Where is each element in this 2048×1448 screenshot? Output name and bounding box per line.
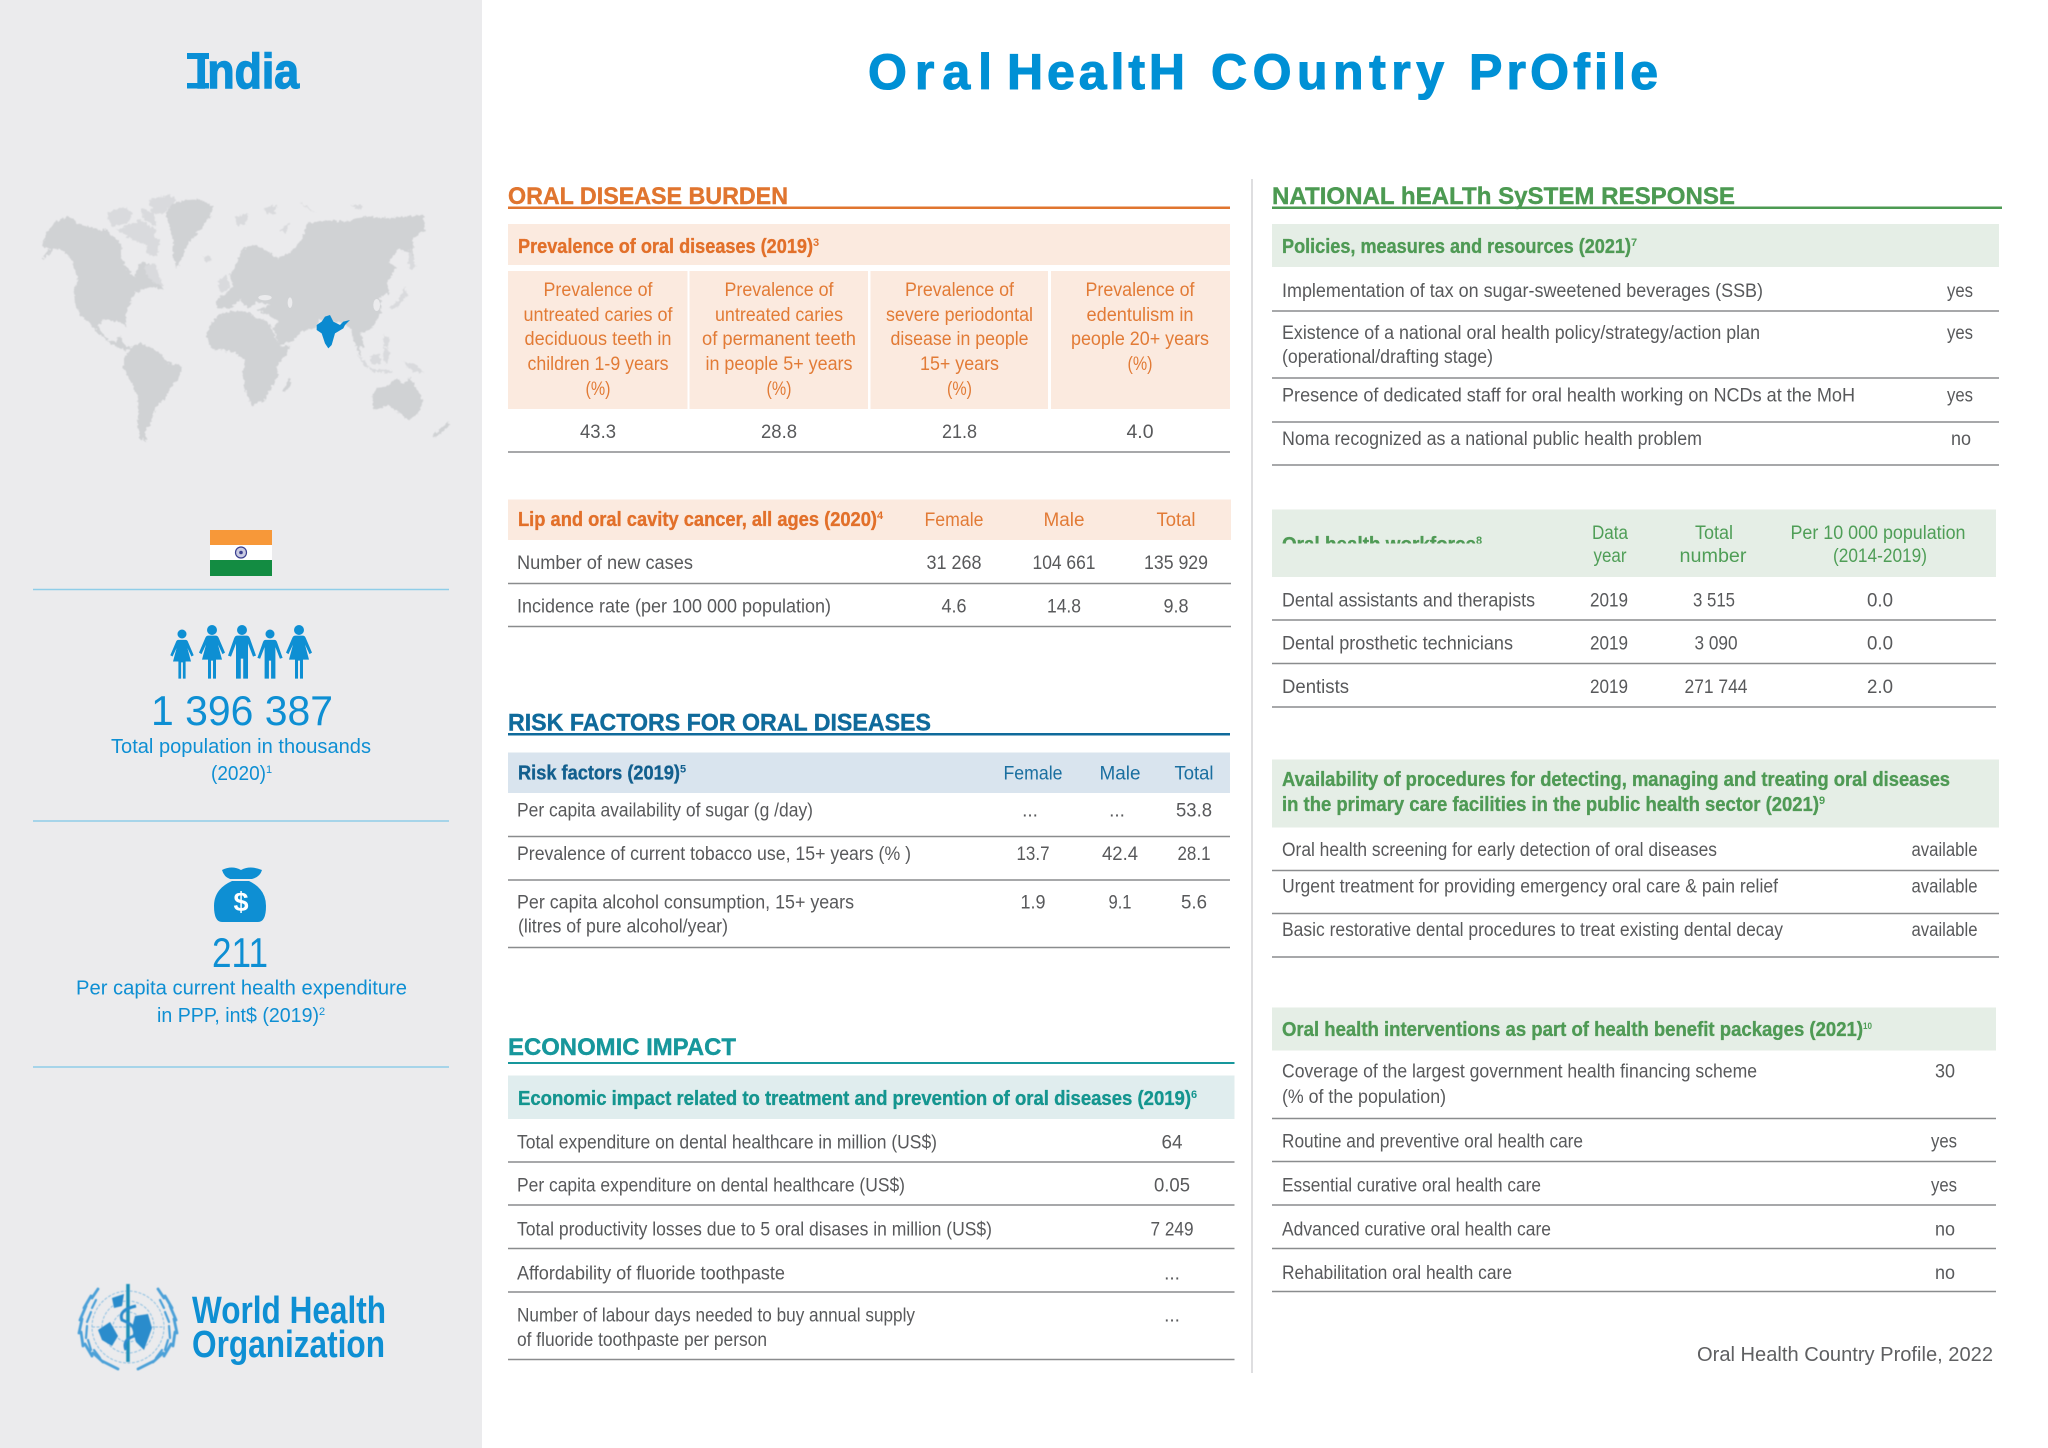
table: lip and oral cavity cancer — [508, 500, 1231, 626]
table: prevalence of oral diseases: in people 5+ years — [706, 354, 852, 375]
table: policies, measures and resources: Policies, measures and resources (2021) — [1282, 236, 1631, 258]
WHO logo — [79, 1284, 386, 1369]
table: oral health interventions: Rehabilitation oral health care — [1282, 1263, 1512, 1284]
population stat: Total population in thousands — [111, 736, 371, 758]
table: oral health interventions: 30 — [1935, 1062, 1955, 1082]
table: economic impact: ... — [1164, 1306, 1180, 1326]
table: availability of procedures: Availability of procedures for detecting, managing and treating oral diseases — [1282, 769, 1950, 791]
population stat — [111, 687, 371, 785]
table: prevalence of oral diseases: (%) — [586, 379, 610, 400]
table: risk factors — [508, 752, 1230, 948]
table: policies, measures and resources: Implementation of tax on sugar-sweetened beverages (SSB) — [1282, 281, 1763, 302]
table: prevalence of oral diseases: 4.0 — [1126, 422, 1154, 443]
table: lip and oral cavity cancer: Female — [924, 510, 984, 531]
table: economic impact: 0.05 — [1154, 1176, 1190, 1196]
table: oral health workforce: Oral health workforce — [1282, 534, 1476, 556]
table: prevalence of oral diseases: Prevalence of — [544, 280, 653, 301]
table: oral health workforce: Dental prosthetic technicians — [1282, 634, 1513, 654]
table: risk factors: ... — [1022, 800, 1038, 822]
Black Sea and Caspian — [258, 295, 380, 311]
heading: NATIONAL hEALTh SySTEM RESPONSE — [1272, 183, 1735, 210]
table: risk factors: Total — [1174, 764, 1214, 784]
table: lip and oral cavity cancer: Male — [1044, 510, 1084, 531]
table: policies, measures and resources: yes — [1947, 281, 1973, 302]
country name: India — [195, 45, 300, 99]
table: prevalence of oral diseases: edentulism in — [1086, 305, 1194, 326]
table: oral health workforce: Data — [1592, 523, 1628, 544]
table: policies, measures and resources: Existence of a national oral health policy/strategy/action plan — [1282, 323, 1760, 344]
table: prevalence of oral diseases: 15+ years — [920, 354, 999, 375]
table: risk factors: 28.1 — [1178, 844, 1210, 865]
table: lip and oral cavity cancer: 4.6 — [942, 596, 966, 618]
table: economic impact — [508, 1076, 1234, 1360]
table: policies, measures and resources: 7 — [1631, 237, 1637, 249]
table: oral health interventions: (% of the population) — [1282, 1087, 1446, 1108]
health expenditure stat: in PPP, int$ (2019) — [157, 1005, 319, 1027]
table: oral health interventions: no — [1935, 1263, 1955, 1284]
table: prevalence of oral diseases: severe periodontal — [886, 305, 1033, 326]
table: oral health interventions: Oral health interventions as part of health benefit packages (2021) — [1282, 1019, 1863, 1041]
health expenditure stat: 211 — [212, 929, 268, 976]
table: oral health interventions: no — [1935, 1220, 1955, 1240]
table: availability of procedures: Oral health screening for early detection of oral diseases — [1282, 840, 1717, 861]
table: oral health workforce: 2.0 — [1867, 677, 1893, 698]
health expenditure stat: 2 — [319, 1006, 325, 1018]
table: prevalence of oral diseases: Prevalence of oral diseases (2019) — [518, 236, 813, 258]
table: prevalence of oral diseases: 28.8 — [761, 422, 797, 443]
table: availability of procedures: in the primary care facilities in the public health sector (2021) — [1282, 794, 1819, 816]
table: oral health interventions: Coverage of the largest government health financing scheme — [1282, 1062, 1757, 1082]
WHO logo: World Health — [192, 1290, 386, 1332]
heading: ECONOMIC IMPACT — [508, 1034, 736, 1061]
section: economic impact — [508, 1034, 1234, 1360]
flag of India — [210, 530, 272, 576]
table: oral health workforce: 3 515 — [1693, 590, 1735, 612]
table: policies, measures and resources — [1272, 224, 1999, 465]
table: lip and oral cavity cancer: 9.8 — [1164, 596, 1188, 618]
table: lip and oral cavity cancer: Total — [1156, 510, 1196, 531]
table: oral health interventions: yes — [1931, 1132, 1957, 1152]
table: oral health workforce: 271 744 — [1684, 677, 1748, 698]
title: HealtH — [1007, 44, 1185, 100]
table: oral health workforce: 3 090 — [1694, 634, 1738, 654]
table: oral health workforce: year — [1594, 546, 1627, 567]
table: lip and oral cavity cancer: 14.8 — [1047, 596, 1081, 618]
table: oral health interventions: Routine and preventive oral health care — [1282, 1132, 1583, 1152]
table: risk factors: Per capita alcohol consumption, 15+ years — [517, 892, 854, 914]
table: economic impact: 6 — [1191, 1089, 1197, 1101]
title: Oral — [868, 44, 992, 100]
table: economic impact: ... — [1164, 1264, 1180, 1284]
table: prevalence of oral diseases: people 20+ years — [1071, 329, 1209, 350]
table: lip and oral cavity cancer: 31 268 — [926, 553, 982, 574]
table: risk factors: 1.9 — [1020, 892, 1046, 914]
section: national health system response — [1272, 183, 2002, 1292]
health expenditure stat: Per capita current health expenditure — [76, 978, 407, 1000]
table: prevalence of oral diseases: children 1-9 years — [528, 354, 668, 375]
table: availability of procedures: available — [1912, 840, 1978, 861]
table: lip and oral cavity cancer: 104 661 — [1032, 553, 1096, 574]
table: lip and oral cavity cancer: 135 929 — [1144, 553, 1208, 574]
table: oral health workforce: Total — [1695, 523, 1733, 544]
table: oral health workforce: number — [1680, 546, 1747, 567]
table: economic impact: 7 249 — [1150, 1220, 1194, 1240]
table: availability of procedures: available — [1912, 876, 1978, 898]
table: prevalence of oral diseases: 43.3 — [580, 422, 616, 443]
table: availability of procedures: 9 — [1819, 795, 1825, 807]
footer: profile source: Oral Health Country Profile, 2022 — [1697, 1344, 1993, 1366]
table: oral health workforce: 2019 — [1590, 634, 1628, 654]
table: oral health interventions: Essential curative oral health care — [1282, 1176, 1541, 1196]
title: COuntry — [1211, 44, 1444, 100]
table: oral health workforce: 2019 — [1590, 590, 1628, 612]
icon: people — [170, 625, 312, 679]
table: policies, measures and resources: yes — [1947, 386, 1973, 406]
section: risk factors — [508, 710, 1230, 948]
world map with India highlighted — [42, 195, 450, 442]
table: availability of procedures: available — [1912, 920, 1978, 941]
table: risk factors: Per capita availability of sugar (g /day) — [517, 800, 813, 822]
table: risk factors: ... — [1109, 800, 1125, 822]
table: oral health interventions — [1272, 1008, 1996, 1292]
India highlight — [317, 315, 350, 348]
table: risk factors: 13.7 — [1016, 844, 1050, 865]
population stat: 1 396 387 — [151, 687, 333, 734]
table: oral health workforce: 0.0 — [1867, 590, 1893, 612]
table: risk factors: Risk factors (2019) — [518, 762, 680, 784]
table: lip and oral cavity cancer: Lip and oral cavity cancer, all ages (2020) — [518, 509, 877, 531]
table: oral health interventions: Advanced curative oral health care — [1282, 1220, 1551, 1240]
table: risk factors: 5 — [680, 764, 686, 776]
table: oral health workforce: Dentists — [1282, 677, 1349, 698]
table: prevalence of oral diseases: (%) — [1128, 354, 1152, 375]
table: risk factors: 42.4 — [1102, 844, 1138, 865]
table: economic impact: Affordability of fluoride toothpaste — [517, 1264, 785, 1284]
table: oral health interventions: 10 — [1863, 1021, 1872, 1031]
table: lip and oral cavity cancer: Number of new cases — [517, 553, 693, 574]
table: prevalence of oral diseases: untreated caries — [715, 305, 843, 326]
section: oral disease burden — [508, 183, 1231, 626]
table: oral health workforce: 8 — [1476, 535, 1482, 547]
table: risk factors: 5.6 — [1181, 892, 1207, 914]
title: PrOfile — [1469, 44, 1658, 100]
table: prevalence of oral diseases: 3 — [813, 237, 819, 249]
table: prevalence of oral diseases — [508, 224, 1230, 452]
table: availability of procedures: Basic restorative dental procedures to treat existing dental decay — [1282, 920, 1783, 941]
table: policies, measures and resources: Noma recognized as a national public health problem — [1282, 429, 1702, 450]
table: risk factors: Prevalence of current tobacco use, 15+ years (% ) — [517, 844, 911, 865]
table: economic impact: Total productivity losses due to 5 oral disases in million (US$) — [517, 1220, 992, 1240]
table: oral health workforce: Dental assistants and therapists — [1282, 590, 1535, 612]
heading: ORAL DISEASE BURDEN — [508, 183, 788, 210]
table: prevalence of oral diseases: 21.8 — [942, 422, 977, 443]
table: policies, measures and resources: Presence of dedicated staff for oral health working on NCDs at the MoH — [1282, 386, 1855, 406]
title — [868, 44, 1658, 100]
table: economic impact: Economic impact related to treatment and prevention of oral diseases (2019) — [518, 1088, 1191, 1110]
table: prevalence of oral diseases: of permanent teeth — [702, 329, 856, 350]
sidebar panel — [0, 0, 482, 1448]
table: oral health workforce: 0.0 — [1867, 634, 1893, 654]
table: availability of procedures — [1272, 760, 1999, 957]
table: oral health workforce: 2019 — [1590, 677, 1628, 698]
table: oral health workforce: (2014-2019) — [1833, 546, 1927, 567]
WHO logo: Organization — [192, 1324, 385, 1366]
heading: RISK FACTORS FOR ORAL DISEASES — [508, 710, 931, 736]
table: prevalence of oral diseases: deciduous teeth in — [524, 329, 672, 350]
table: prevalence of oral diseases: disease in people — [890, 329, 1028, 350]
table: policies, measures and resources: (operational/drafting stage) — [1282, 347, 1493, 368]
table: economic impact: Total expenditure on dental healthcare in million (US$) — [517, 1132, 937, 1154]
population stat: (2020) — [211, 763, 266, 785]
table: risk factors: (litres of pure alcohol/year) — [518, 916, 728, 938]
table: lip and oral cavity cancer: 4 — [877, 510, 884, 522]
table: policies, measures and resources: yes — [1947, 323, 1973, 344]
table: oral health workforce — [1272, 510, 1996, 707]
table: prevalence of oral diseases: (%) — [947, 379, 972, 400]
table: availability of procedures: Urgent treatment for providing emergency oral care & pain relief — [1282, 876, 1779, 898]
population stat: 1 — [266, 764, 272, 776]
table: prevalence of oral diseases: Prevalence of — [1086, 280, 1195, 301]
table: economic impact: Per capita expenditure on dental healthcare (US$) — [517, 1176, 905, 1196]
table: prevalence of oral diseases: (%) — [766, 379, 792, 400]
table: policies, measures and resources: no — [1951, 429, 1971, 450]
table: risk factors: Female — [1004, 764, 1062, 784]
table: economic impact: Number of labour days needed to buy annual supply — [517, 1306, 915, 1326]
table: risk factors: 53.8 — [1176, 800, 1212, 822]
table: oral health workforce: Per 10 000 population — [1790, 523, 1966, 544]
table: oral health interventions: yes — [1931, 1176, 1957, 1196]
health expenditure stat — [76, 929, 407, 1027]
table: prevalence of oral diseases: Prevalence of — [905, 280, 1015, 301]
table: economic impact: 64 — [1162, 1132, 1183, 1154]
table: risk factors: 9.1 — [1108, 892, 1132, 914]
table: prevalence of oral diseases: untreated caries of — [524, 305, 673, 326]
table: prevalence of oral diseases: Prevalence of — [724, 280, 834, 301]
table: risk factors: Male — [1100, 764, 1140, 784]
icon: money bag: $ — [233, 887, 249, 917]
table: economic impact: of fluoride toothpaste per person — [517, 1330, 767, 1351]
table: lip and oral cavity cancer: Incidence rate (per 100 000 population) — [517, 596, 831, 618]
icon: money bag — [214, 868, 266, 922]
